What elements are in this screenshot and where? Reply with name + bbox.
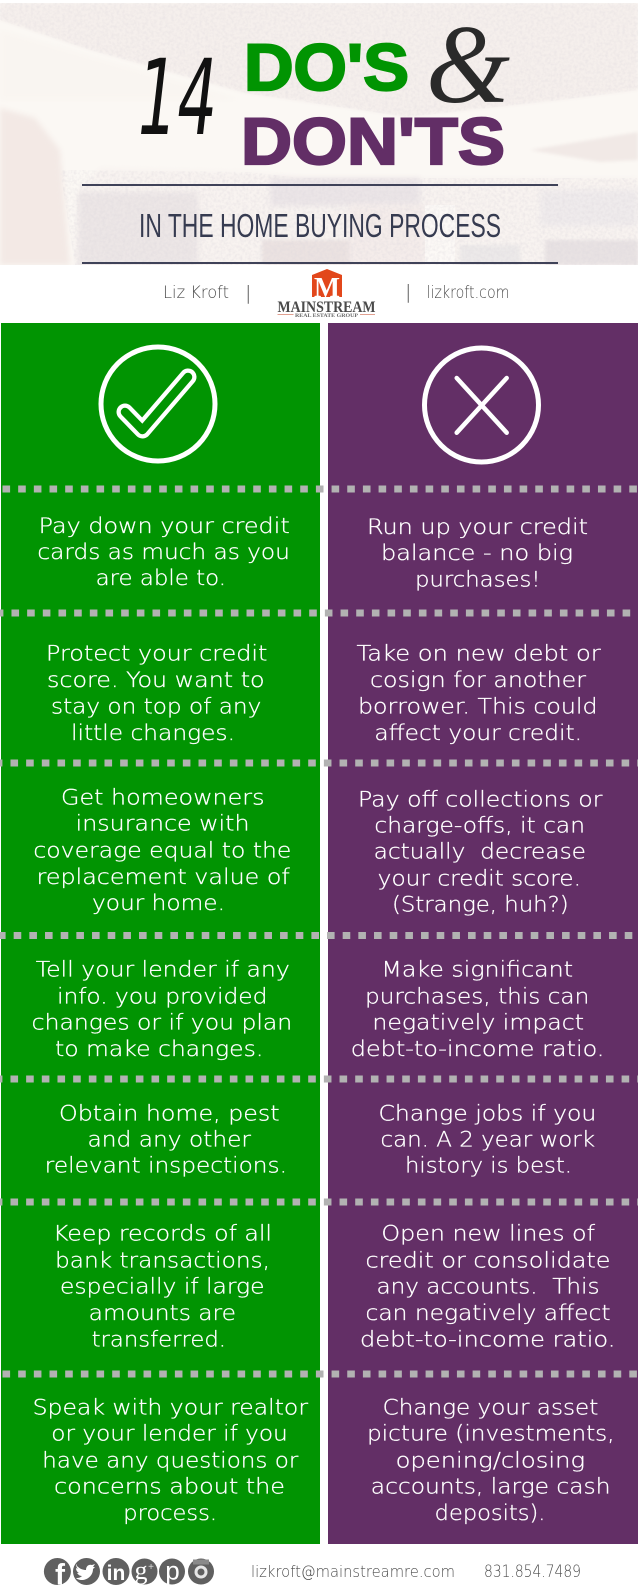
do: obtain inspections <box>45 1102 287 1178</box>
don't: change jobs: Change jobs if you <box>378 1102 596 1126</box>
logo: Mainstream Real Estate Group: REAL ESTATE GROUP <box>295 313 359 319</box>
do: pay down credit cards: Pay down your credit <box>39 514 290 538</box>
panel: do's column <box>1 323 320 1544</box>
do: get homeowners insurance: Get homeowners <box>61 786 264 810</box>
don't: run up credit balance: Run up your credit <box>367 515 588 539</box>
icon: linkedin <box>102 1558 130 1585</box>
do: tell your lender: changes or if you plan <box>32 1010 292 1034</box>
don't: open new lines of credit: Open new lines of <box>381 1222 596 1246</box>
do: tell your lender <box>32 958 292 1061</box>
don't: pay off collections <box>358 788 603 917</box>
don't: change jobs: can. A 2 year work <box>380 1128 595 1152</box>
don't: make significant purchases: negatively impact <box>372 1010 584 1034</box>
do: get homeowners insurance: your home. <box>92 891 225 915</box>
title: DO'S: DO'S <box>244 30 409 104</box>
don't: open new lines of credit: credit or consolidate <box>366 1248 610 1272</box>
divider pipe right: | <box>405 281 411 303</box>
do: keep records: bank transactions, <box>55 1248 270 1272</box>
rule below subtitle <box>82 262 558 264</box>
don't: take on new debt: borrower. This could <box>358 694 598 718</box>
byline: Liz Kroft: Liz Kroft <box>163 283 229 303</box>
do: protect credit score: little changes. <box>71 721 235 745</box>
do: keep records: Keep records of all <box>53 1222 272 1246</box>
don't: pay off collections: charge-offs, it can <box>374 814 585 838</box>
do: keep records: especially if large <box>60 1275 264 1299</box>
header background photo <box>0 3 638 265</box>
do: speak with realtor or lender: process. <box>123 1501 217 1525</box>
don't: change asset picture: Change your asset <box>383 1395 598 1419</box>
don't: change asset picture <box>367 1395 615 1525</box>
do: pay down credit cards: cards as much as you <box>37 540 290 564</box>
icon: google plus: g <box>134 1556 148 1585</box>
don't: make significant purchases: debt-to-income ratio. <box>351 1037 604 1061</box>
rule above subtitle <box>82 184 558 186</box>
do: get homeowners insurance: replacement value of <box>37 865 290 889</box>
don't: take on new debt: Take on new debt or <box>356 642 601 666</box>
do: get homeowners insurance <box>33 786 291 915</box>
don't: take on new debt <box>356 642 601 745</box>
don't: change jobs: history is best. <box>405 1154 572 1178</box>
logo: Mainstream Real Estate Group <box>278 269 376 319</box>
icon: google plus: + <box>148 1562 154 1573</box>
do: protect credit score: score. You want to <box>47 668 265 692</box>
don't: pay off collections: actually decrease <box>374 840 586 864</box>
icon: google plus <box>132 1556 158 1585</box>
do: speak with realtor or lender <box>33 1395 308 1525</box>
title: 14: 14 <box>138 37 217 159</box>
don't: run up credit balance: purchases! <box>415 568 540 592</box>
don't: open new lines of credit: any accounts. This <box>376 1275 600 1299</box>
divider pipe left: | <box>245 282 251 304</box>
title: DON'TS: DON'TS <box>241 104 505 178</box>
do: protect credit score <box>46 642 267 745</box>
do: pay down credit cards <box>37 514 290 590</box>
don't: change jobs <box>378 1102 596 1178</box>
do: obtain inspections: Obtain home, pest <box>59 1102 280 1126</box>
do: speak with realtor or lender: Speak with your realtor <box>33 1395 308 1419</box>
don't: run up credit balance <box>367 515 588 592</box>
icon: facebook: f <box>55 1558 66 1592</box>
do: speak with realtor or lender: have any questions or <box>42 1448 299 1472</box>
icon: twitter <box>73 1558 100 1585</box>
do: get homeowners insurance: insurance with <box>76 812 250 836</box>
don't: change asset picture: deposits). <box>435 1501 545 1525</box>
footer phone: 831.854.7489 <box>484 1562 581 1582</box>
do: get homeowners insurance: coverage equal to the <box>33 838 291 862</box>
don't: pay off collections: your credit score. <box>378 867 581 891</box>
icon: cross in circle <box>424 348 538 462</box>
don't: take on new debt: cosign for another <box>370 668 586 692</box>
do: tell your lender: to make changes. <box>55 1037 263 1061</box>
do: tell your lender: info. you provided <box>57 984 267 1008</box>
logo: Mainstream Real Estate Group: M <box>314 273 340 304</box>
don't: open new lines of credit: can negatively affect <box>366 1301 610 1325</box>
panel: don'ts column <box>328 323 638 1544</box>
do: speak with realtor or lender: concerns about the <box>54 1475 285 1499</box>
do: keep records <box>53 1222 272 1352</box>
do: protect credit score: Protect your credit <box>46 642 267 666</box>
do: tell your lender: Tell your lender if any <box>36 958 290 982</box>
do: keep records: amounts are <box>89 1301 236 1325</box>
don't: run up credit balance: balance - no big <box>381 541 573 565</box>
don't: change asset picture: picture (investments, <box>367 1422 615 1446</box>
don't: open new lines of credit: debt-to-income ratio. <box>360 1328 615 1352</box>
don't: open new lines of credit <box>360 1222 615 1352</box>
don't: change asset picture: accounts, large cash <box>371 1475 610 1499</box>
do: obtain inspections: relevant inspections. <box>45 1154 287 1178</box>
logo: Mainstream Real Estate Group: MAINSTREAM <box>278 299 376 316</box>
don't: make significant purchases: Make significant <box>381 958 573 982</box>
do: speak with realtor or lender: or your lender if you <box>51 1422 288 1446</box>
don't: take on new debt: affect your credit. <box>374 721 582 745</box>
don't: make significant purchases: purchases, this can <box>365 984 589 1008</box>
byline: website: lizkroft.com <box>426 283 510 303</box>
do: protect credit score: stay on top of any <box>51 694 261 718</box>
don't: pay off collections: (Strange, huh?) <box>392 893 569 917</box>
do: keep records: transferred. <box>92 1328 226 1352</box>
don't: make significant purchases <box>351 958 604 1061</box>
icon: pinterest <box>159 1556 185 1586</box>
footer social icons <box>44 1556 214 1592</box>
icon: facebook <box>44 1558 71 1592</box>
icon: linkedin: in <box>107 1562 125 1585</box>
icon: pinterest: p <box>165 1556 180 1586</box>
footer email: lizkroft@mainstreamre.com <box>251 1562 455 1581</box>
do: pay down credit cards: are able to. <box>96 566 226 590</box>
don't: pay off collections: Pay off collections or <box>358 788 603 812</box>
title: ampersand: & <box>426 3 510 127</box>
don't: change asset picture: opening/closing <box>396 1448 585 1472</box>
icon: instagram <box>188 1558 214 1584</box>
do: obtain inspections: and any other <box>88 1128 251 1152</box>
icon: check mark in circle <box>101 347 215 461</box>
